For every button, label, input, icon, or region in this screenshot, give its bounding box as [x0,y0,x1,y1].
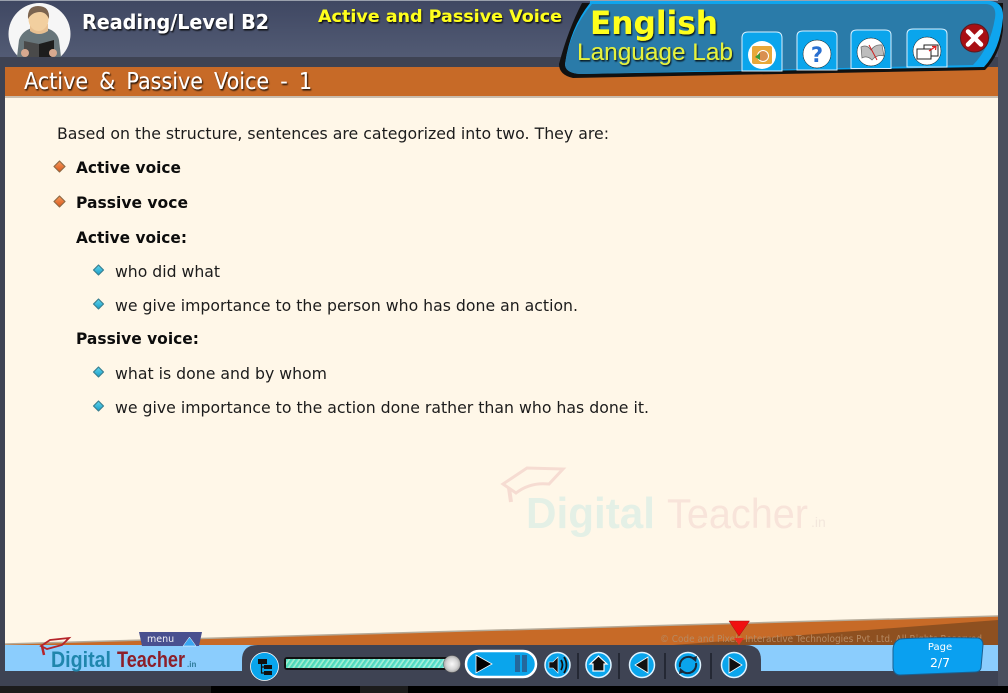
content panel [5,98,998,646]
heading: topic: Active and Passive Voice [318,7,562,27]
watermark logo: Teacher [667,490,808,537]
brand subtitle: Language Lab [577,39,733,66]
section: passive voice: what is done and by whom [115,364,327,383]
page indicator [893,638,983,675]
title bar [5,67,998,98]
progress bar [284,656,460,672]
play pause control [466,651,536,677]
title: Active & Passive Voice - 1 [24,69,312,95]
watermark logo: Digital [526,489,655,538]
red marker [729,621,750,645]
page indicator: Page [928,642,952,653]
section: passive voice: Passive voice: [76,329,199,348]
footer band [5,616,998,671]
section: active voice: we give importance to the person who has done an action. [115,296,578,315]
icon: help tab [797,31,837,70]
section: passive voice: we give importance to the action done rather than who has done it. [115,398,649,417]
English Language Lab panel [559,1,1003,78]
icon: tree menu button [250,652,278,680]
menu tab [139,632,202,646]
brand title: English [590,4,718,42]
icon: help tab: ? [811,43,823,67]
watermark logo [503,468,826,538]
text block: intro: Based on the structure, sentences are categorized into two. They are: [57,124,609,143]
bullet list: voice types: Passive voce [76,193,188,212]
icon: replay [676,652,700,678]
page indicator: 2/7 [930,655,950,670]
heading: level: Reading/Level B2 [82,10,269,34]
icon: window tab [907,29,947,67]
section: passive voice [76,329,649,417]
icon: back [630,652,654,678]
icon: book tab [851,30,891,68]
bullet list: voice types: Active voice [76,158,181,177]
section: active voice: who did what [115,262,220,281]
logo: Digital Teacher: Digital [51,647,111,672]
icon: close button [960,24,988,52]
menu tab: menu [147,634,174,645]
control bar [242,645,761,686]
icon: sound [545,652,570,678]
icon: next [722,652,746,678]
section: active voice: Active voice: [76,228,187,247]
icon: folder tab [742,32,782,71]
watermark logo: .in [811,514,826,530]
bullet list: voice types [54,158,188,212]
logo: Digital Teacher [41,638,196,672]
icon: student reading avatar [8,3,70,57]
icon: home [586,652,611,678]
logo: Digital Teacher: Teacher [117,647,185,672]
copyright: © Code and Pixels Interactive Technologies Pvt. Ltd. All Rights Reserved [660,634,982,645]
control separators [578,653,711,679]
logo: Digital Teacher: .in [187,660,196,669]
section: active voice [76,228,578,315]
